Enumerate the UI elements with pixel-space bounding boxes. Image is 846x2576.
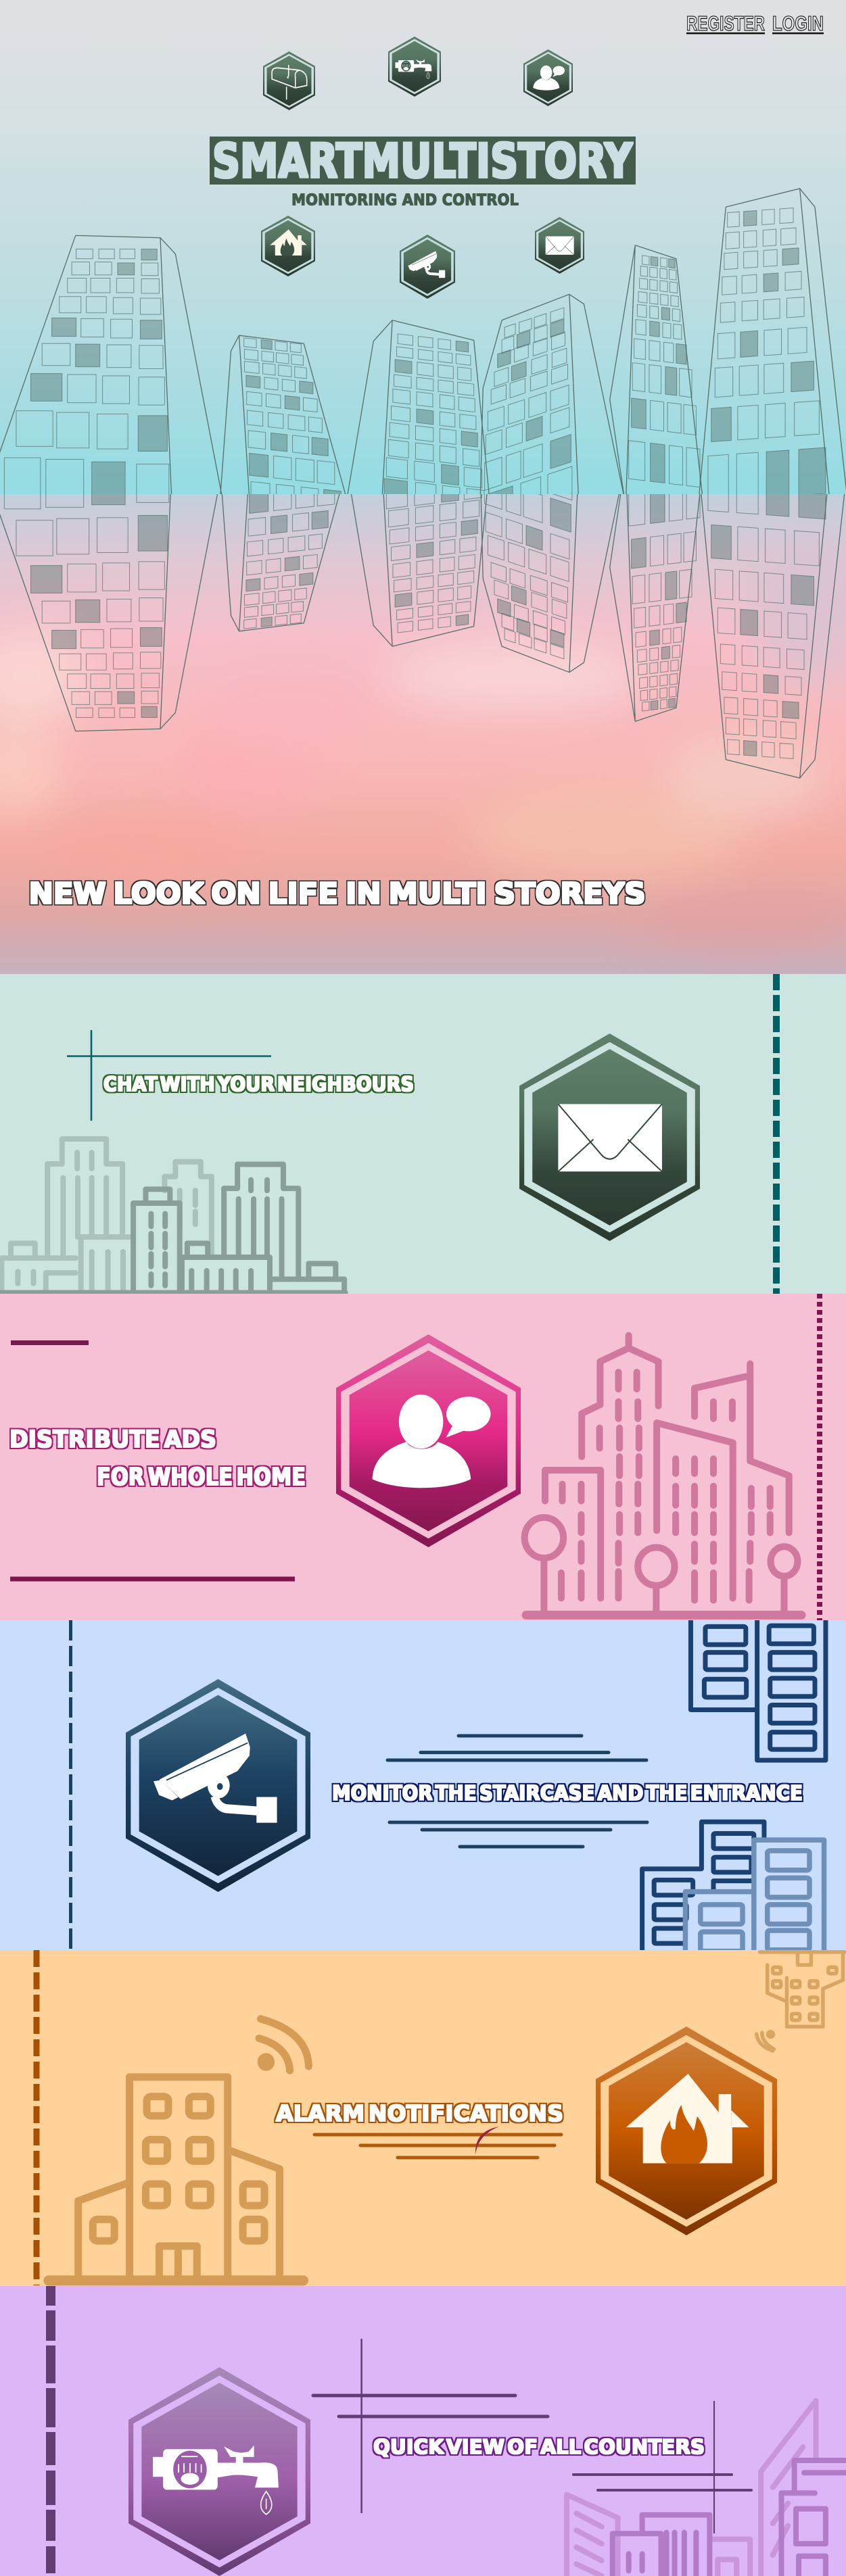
heading: MONITOR THE STAIRCASE AND THE ENTRANCE bbox=[332, 1782, 803, 1805]
panel: distribute ads bbox=[0, 1294, 846, 1620]
lower hero: pink clouds bbox=[0, 494, 846, 974]
icon: envelope hexagon bbox=[519, 1034, 700, 1241]
icon: mail hexagon bbox=[535, 217, 584, 274]
icon: burning house hexagon bbox=[596, 2026, 777, 2235]
city illustration bbox=[525, 1336, 801, 1615]
panel: quick view of counters bbox=[0, 2286, 846, 2576]
icon: camera hexagon bbox=[126, 1679, 310, 1892]
subtitle: MONITORING AND CONTROL bbox=[291, 192, 519, 210]
title: SMARTMULTISTORY bbox=[212, 134, 633, 189]
heading: QUICK VIEW OF ALL COUNTERS bbox=[373, 2435, 705, 2458]
register and login links: REGISTER bbox=[686, 11, 765, 35]
icon: camera hexagon bbox=[400, 235, 455, 299]
skyline illustration bbox=[0, 1139, 346, 1292]
icon: person chat hexagon bbox=[336, 1334, 521, 1547]
underline strokes bbox=[314, 2127, 561, 2158]
cross lines bbox=[67, 1030, 271, 1121]
cross lines right bbox=[573, 2401, 751, 2533]
heading: CHAT WITH YOUR NEIGHBOURS bbox=[103, 1073, 414, 1096]
icon: fire alarm hexagon bbox=[261, 216, 315, 276]
panel: chat with neighbours bbox=[0, 974, 846, 1294]
icon: water meter hexagon bbox=[388, 37, 441, 97]
cross lines left bbox=[313, 2339, 548, 2513]
heading: FOR WHOLE HOME bbox=[97, 1463, 306, 1491]
register and login links: LOGIN bbox=[772, 11, 824, 35]
heading bbox=[9, 1426, 306, 1491]
icon: person chat hexagon bbox=[523, 49, 573, 106]
buildings skyline bbox=[0, 189, 846, 523]
heading: DISTRIBUTE ADS bbox=[9, 1426, 216, 1453]
building illustration bbox=[49, 1952, 845, 2281]
panel: alarm notifications bbox=[0, 1950, 846, 2286]
panel: hero sky with skyline bbox=[0, 0, 846, 974]
heading: ALARM NOTIFICATIONS bbox=[276, 2100, 563, 2127]
icon: mailbox hexagon bbox=[263, 51, 315, 110]
reflected buildings bbox=[0, 494, 845, 779]
buildings illustration bbox=[642, 1618, 826, 1956]
city illustration bbox=[567, 2401, 846, 2576]
speed lines bbox=[387, 1736, 647, 1847]
panel: monitor staircase bbox=[0, 1618, 846, 1956]
tagline: NEW LOOK ON LIFE IN MULTI STOREYS bbox=[28, 877, 646, 911]
icon: water meter hexagon bbox=[128, 2367, 310, 2576]
